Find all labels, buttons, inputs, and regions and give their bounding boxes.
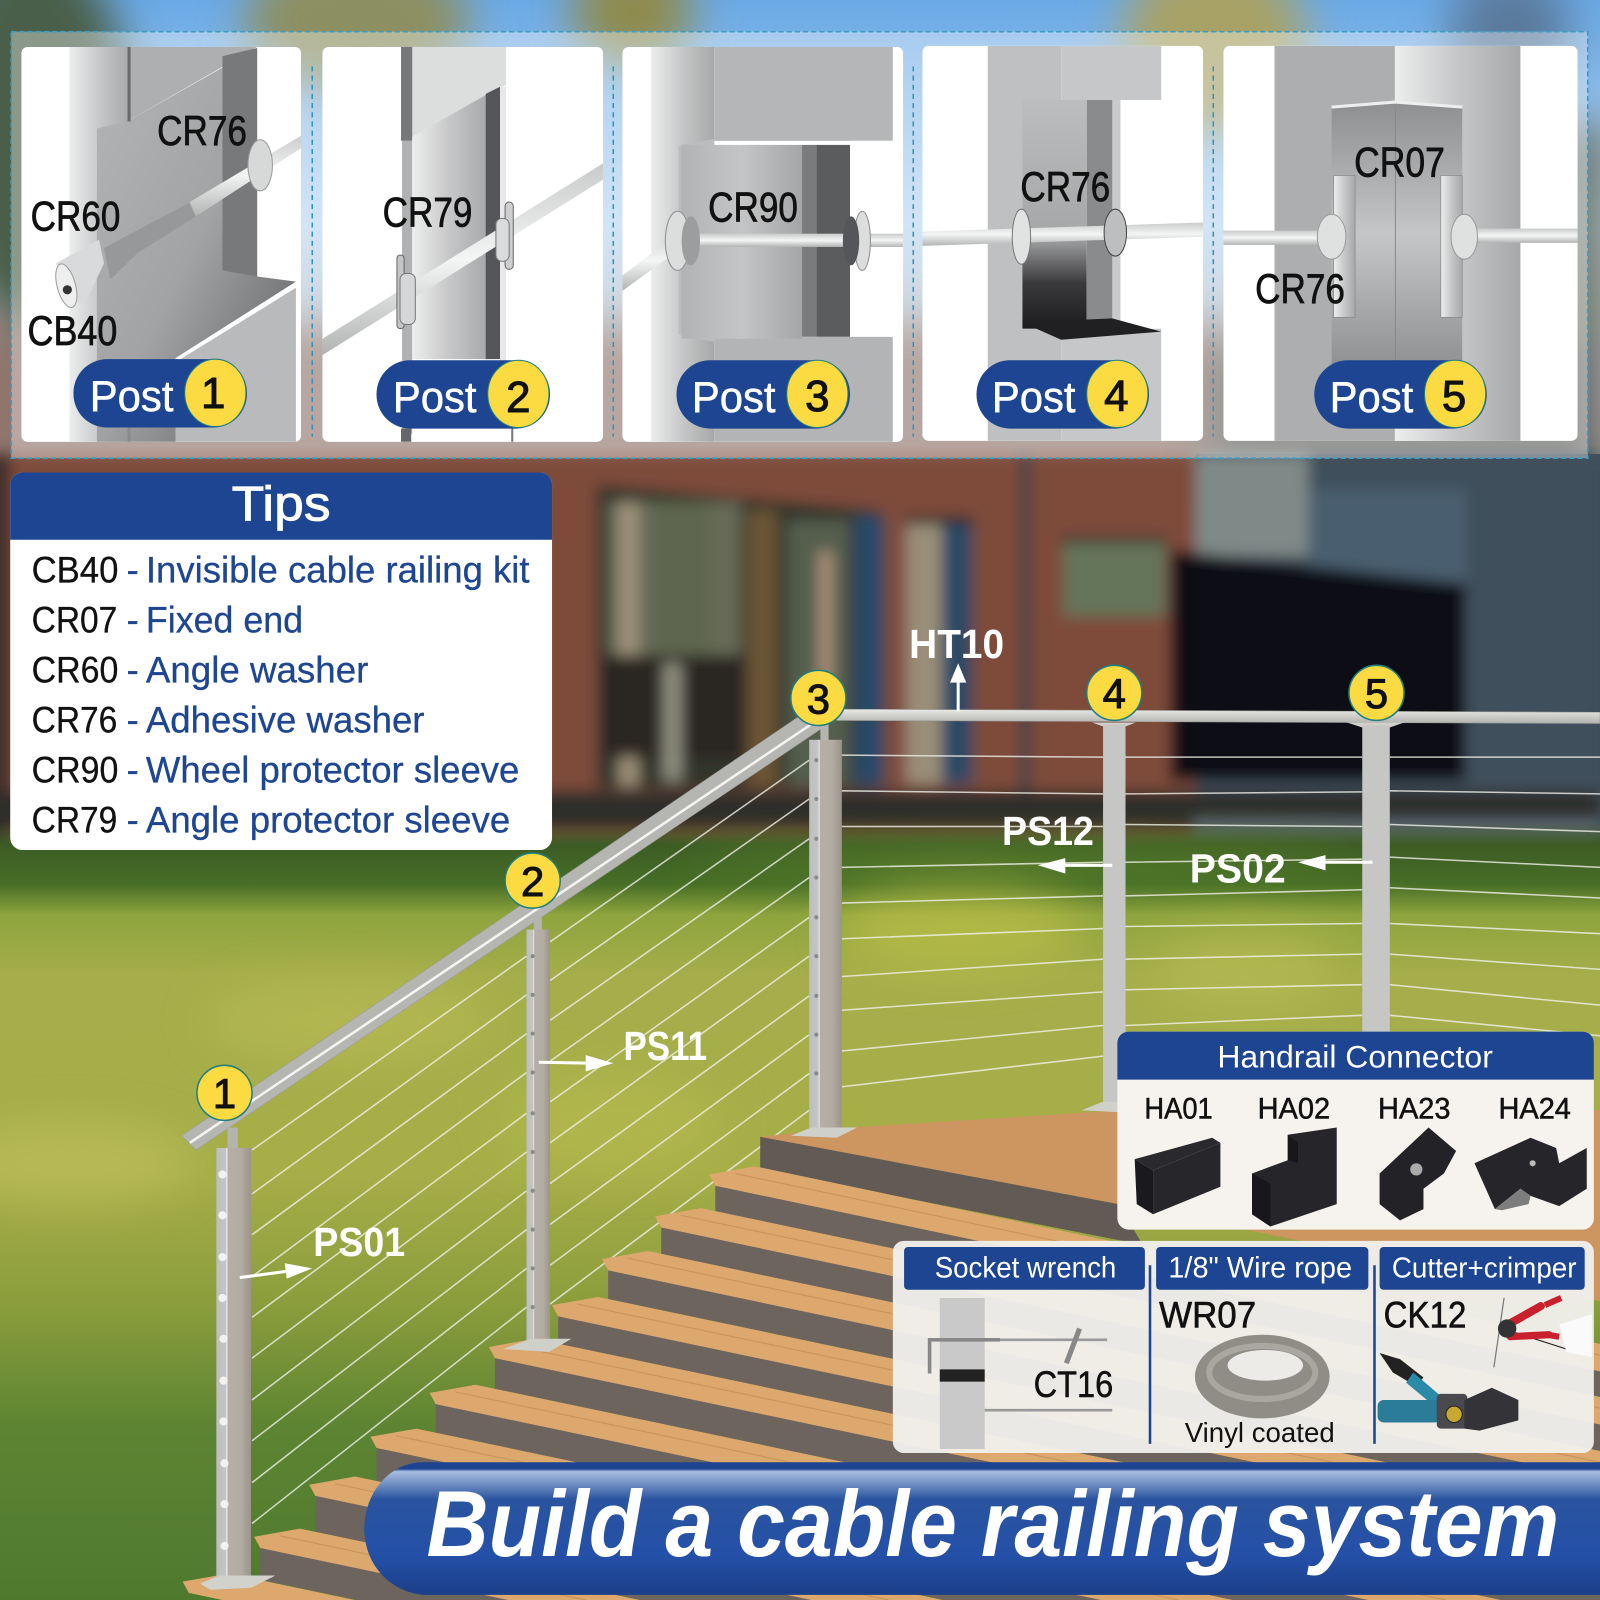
badge: post 3: 3	[805, 372, 830, 421]
window two	[906, 522, 943, 784]
tips list: Invisible cable railing kit	[146, 550, 530, 591]
panel: post 1 detail	[21, 47, 306, 442]
tips header	[10, 472, 552, 540]
icon: socket wrench on post	[930, 1298, 1112, 1449]
tool header: socket wrench	[904, 1247, 1145, 1290]
icon: HA02 block	[1252, 1128, 1337, 1227]
callout: PS11	[539, 1023, 707, 1071]
washers	[397, 255, 404, 329]
marker 2	[505, 853, 560, 908]
label: CR76	[1020, 163, 1110, 210]
labels: CR76	[1255, 265, 1345, 312]
labels	[1255, 139, 1445, 312]
cable	[922, 222, 1203, 246]
icon: hydraulic crimper	[1378, 1353, 1518, 1431]
risers	[260, 1184, 1600, 1600]
posts	[200, 722, 1404, 1590]
callout: HT10: HT10	[909, 621, 1004, 667]
panel: tips	[10, 472, 552, 850]
number markers on posts	[197, 665, 1404, 1120]
tool header: cutter and crimper	[1380, 1247, 1585, 1290]
badge: post 1	[73, 359, 247, 428]
badge: post 5	[1314, 360, 1487, 429]
plinth	[0, 791, 1600, 830]
washer CR76	[248, 140, 272, 191]
CR07 tubes	[1334, 176, 1355, 317]
tips title: Tips	[232, 477, 331, 531]
icon: HA23 hinge	[1380, 1128, 1456, 1220]
cable	[694, 234, 903, 247]
marker 2: 2	[521, 858, 544, 905]
callout: PS01: PS01	[313, 1219, 405, 1265]
panel: post 3 detail	[622, 47, 903, 442]
callout: PS02: PS02	[1190, 846, 1286, 892]
fitting CB40	[104, 203, 196, 280]
label: CR90	[708, 183, 798, 230]
panel: tools	[893, 1241, 1594, 1453]
callout: PS01	[240, 1219, 405, 1279]
panel: post 2 detail	[322, 47, 603, 442]
window one	[597, 485, 880, 788]
downpipe	[1020, 454, 1031, 827]
marker 5	[1349, 665, 1404, 720]
tips list: CB40	[32, 550, 118, 591]
badge: post 3: Post	[692, 373, 776, 422]
labels	[28, 107, 247, 354]
labels: CR60	[31, 193, 120, 240]
treads	[183, 1166, 1600, 1600]
tips list: Angle washer	[146, 650, 368, 691]
title banner	[364, 1462, 1600, 1595]
part labels: HA24	[1498, 1092, 1571, 1125]
badge: post 3	[677, 360, 850, 429]
tips list: CR90	[32, 750, 118, 791]
callout: PS12: PS12	[1002, 808, 1094, 854]
badge: post 2	[377, 360, 550, 429]
cable	[1224, 230, 1318, 245]
badge: post 4: Post	[992, 373, 1076, 422]
cable	[190, 133, 306, 216]
deck surface	[760, 1110, 1600, 1301]
badge: post 5: 5	[1442, 372, 1466, 421]
marker 4	[1087, 665, 1142, 720]
callout: PS12	[1002, 808, 1112, 873]
deck fascia	[760, 1137, 1143, 1245]
tool header: socket wrench: Socket wrench	[935, 1252, 1116, 1285]
tread plank lines	[280, 1173, 1600, 1600]
marker 1: 1	[213, 1070, 236, 1117]
washers	[1012, 209, 1031, 264]
icon: HA24 hinge	[1474, 1138, 1587, 1210]
panel: handrail connector	[1117, 1032, 1594, 1230]
tips list: -	[127, 800, 139, 841]
icon: HA01 block	[1135, 1138, 1220, 1214]
callout: HT10	[909, 621, 1004, 711]
protectors	[665, 211, 690, 270]
handrail	[182, 709, 1600, 1150]
tool header: wire rope	[1156, 1247, 1368, 1290]
tips list: Adhesive washer	[146, 700, 424, 741]
label: CK12: CK12	[1384, 1295, 1466, 1336]
tips list: CR60	[32, 650, 118, 691]
tips list: Wheel protector sleeve	[146, 750, 519, 791]
label: vinyl coated: Vinyl coated	[1185, 1417, 1335, 1448]
label: CR79	[383, 189, 472, 236]
tips list: CR79	[32, 800, 117, 841]
tips list: -	[127, 550, 139, 591]
window three	[1063, 540, 1165, 616]
staircase and deck	[183, 1110, 1600, 1600]
tips list: CR07	[32, 600, 117, 641]
badge: post 4	[977, 360, 1149, 429]
cable	[322, 163, 603, 355]
labels: CR76	[157, 107, 247, 154]
badge: post 2: Post	[393, 373, 477, 422]
panel: post 4 detail	[922, 46, 1203, 442]
tips list: -	[127, 600, 139, 641]
callout: PS11: PS11	[623, 1023, 707, 1069]
panel: post 5 detail	[1223, 46, 1578, 442]
labels: CR07	[1354, 139, 1445, 186]
tips list: Angle protector sleeve	[146, 800, 510, 841]
tool header: cutter and crimper: Cutter+crimper	[1392, 1253, 1577, 1285]
tips list	[32, 550, 530, 841]
part labels: HA01	[1144, 1092, 1213, 1125]
part labels: HA02	[1258, 1092, 1330, 1125]
marker 1	[197, 1065, 252, 1120]
cables between posts	[252, 755, 1600, 1523]
tips list: CR76	[32, 700, 117, 741]
handrail connector title: Handrail Connector	[1217, 1038, 1493, 1074]
washers	[1317, 214, 1346, 259]
badge: post 5: Post	[1330, 373, 1413, 422]
badge: post 4: 4	[1104, 372, 1129, 421]
marker 3	[791, 670, 846, 726]
tips list: Fixed end	[146, 600, 303, 641]
badge: post 1: 1	[201, 369, 225, 418]
part labels	[1144, 1092, 1571, 1125]
badge: post 2: 2	[506, 373, 531, 422]
part labels: HA23	[1378, 1092, 1451, 1125]
badge: post 1: Post	[90, 372, 173, 421]
tips list: -	[127, 750, 139, 791]
callout: PS02	[1190, 846, 1372, 892]
tool header: wire rope: 1/8" Wire rope	[1168, 1252, 1352, 1285]
marker 5: 5	[1365, 670, 1388, 717]
tips list: -	[127, 700, 139, 741]
tips list: -	[127, 650, 139, 691]
icon: wire rope coil	[1195, 1335, 1330, 1418]
marker 4: 4	[1103, 670, 1126, 717]
wall and neighbouring buildings	[0, 454, 1196, 862]
marker 3: 3	[807, 675, 830, 722]
labels: CB40	[28, 307, 117, 354]
handrail connector header	[1117, 1032, 1594, 1080]
icon: cable cutter	[1494, 1298, 1592, 1367]
label: CT16: CT16	[1034, 1364, 1113, 1405]
label: WR07: WR07	[1159, 1295, 1256, 1336]
frame: post detail strip	[11, 32, 1588, 458]
